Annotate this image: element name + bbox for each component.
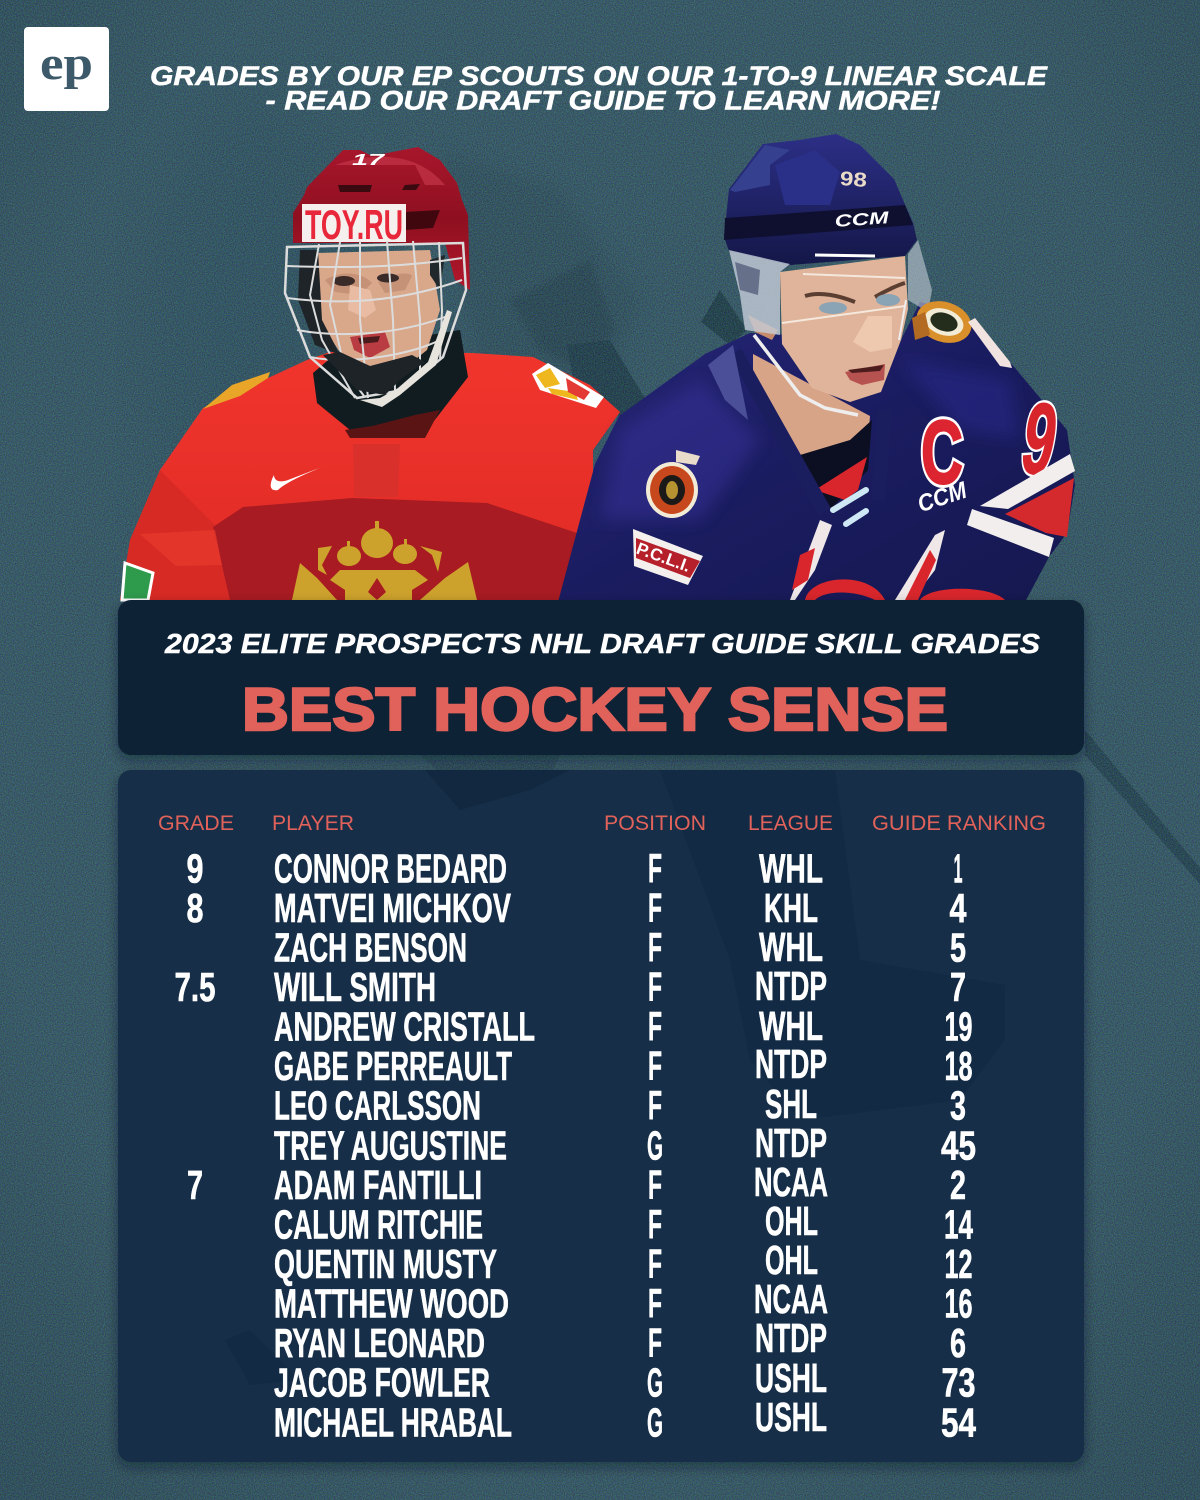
row: Ryan Leonard [274,1315,966,1366]
row: Will Smith: WILL SMITH [274,964,436,1010]
row: Michael Hrabal: 54 [941,1399,976,1445]
heading: BEST HOCKEY SENSE [242,676,948,743]
row: Zach Benson: WHL [759,924,823,970]
row: Gabe Perreault: F [648,1043,662,1089]
helmet [724,134,917,265]
panel: title banner [118,600,1084,755]
captain letter [914,403,971,518]
crest: golden eagle [292,521,477,600]
row: Adam Fantilli: 2 [950,1162,966,1208]
row: Gabe Perreault [274,1041,972,1089]
row: Zach Benson: 5 [950,924,966,970]
table header: GRADE [158,812,234,835]
row: Ryan Leonard: NTDP [755,1315,827,1361]
row: Will Smith: 7.5 [174,964,216,1010]
row: Calum Ritchie: OHL [765,1198,818,1244]
row: Will Smith: 7 [950,964,966,1010]
row: Adam Fantilli: ADAM FANTILLI [274,1162,482,1208]
row: Connor Bedard: CONNOR BEDARD [274,845,507,891]
helmet [293,147,470,290]
row: Calum Ritchie: F [648,1201,662,1247]
collar [735,352,885,512]
row: Matthew Wood [274,1276,972,1327]
patch: p.c.l.i.: P.C.L.I. [634,539,693,576]
sleeve number: 9 [1014,380,1065,498]
row: Zach Benson: F [648,924,662,970]
table header: POSITION [604,812,706,835]
row: Will Smith: F [648,964,662,1010]
row: Trey Augustine: TREY AUGUSTINE [274,1122,507,1168]
row: Andrew Cristall: F [648,1004,662,1050]
row: Leo Carlsson: 3 [950,1083,966,1129]
helmet sticker: toy.ru: TOY.RU [305,201,403,248]
row: Ryan Leonard: F [648,1320,662,1366]
row: Andrew Cristall: ANDREW CRISTALL [274,1004,535,1050]
row: Gabe Perreault: GABE PERREAULT [274,1043,512,1089]
row: Michael Hrabal [274,1394,976,1445]
row: Matthew Wood: NCAA [754,1276,828,1322]
table header: LEAGUE [748,812,833,835]
row: Matvei Michkov: 4 [950,885,967,931]
helmet sticker: toy.ru [302,201,406,248]
row: Connor Bedard: 9 [186,845,204,891]
row: Jacob Fowler [274,1355,976,1406]
row: Will Smith: NTDP [755,963,827,1009]
row: Leo Carlsson [274,1081,966,1129]
row: Connor Bedard: F [648,845,662,891]
row: Jacob Fowler: 73 [942,1360,976,1406]
row: Connor Bedard: WHL [759,845,823,891]
row: Calum Ritchie: CALUM RITCHIE [274,1201,483,1247]
subtitle: 2023 ELITE PROSPECTS NHL DRAFT GUIDE SKILL GRADES [164,628,1040,659]
row: Gabe Perreault: 18 [944,1043,972,1089]
row: Adam Fantilli: F [648,1162,662,1208]
row: Michael Hrabal: MICHAEL HRABAL [274,1399,512,1445]
row: Ryan Leonard: RYAN LEONARD [274,1320,485,1366]
row: Leo Carlsson: SHL [765,1081,817,1127]
icon: swoosh [271,467,322,490]
intro text: grades note: - READ OUR DRAFT GUIDE TO LEARN MORE! [266,86,940,116]
undershirt [790,420,872,510]
row: Quentin Musty: OHL [765,1237,818,1283]
row: Ryan Leonard: 6 [950,1320,966,1366]
row: Connor Bedard [186,845,962,891]
sleeve number: 9 [1014,380,1065,498]
row: Quentin Musty: QUENTIN MUSTY [274,1241,497,1287]
row: Matthew Wood: MATTHEW WOOD [274,1281,509,1327]
row: Andrew Cristall: WHL [759,1003,823,1049]
row: Matvei Michkov: MATVEI MICHKOV [274,885,511,931]
neck [753,354,870,485]
row: Trey Augustine: NTDP [755,1120,827,1166]
row: Jacob Fowler: USHL [755,1355,827,1401]
captain letter: C [921,403,963,503]
captain letter: C [921,403,963,503]
helmet number: 98 [839,168,868,192]
row: Gabe Perreault: NTDP [755,1041,827,1087]
player photo: red team jersey [120,147,620,600]
jersey badge: green sleeve [122,563,153,600]
neck gaiter [313,330,468,430]
visor [729,240,932,415]
shoulder patch: right [532,363,604,408]
logo: elite prospects [24,27,109,111]
chin guard [323,352,425,395]
row: Quentin Musty: F [648,1241,662,1287]
panel: grades table [118,770,1084,1462]
intro text: grades note [150,61,1048,116]
row: Matvei Michkov: F [648,885,662,931]
shoulder crest [646,450,700,518]
row: Andrew Cristall: 19 [944,1004,972,1050]
row: Jacob Fowler: G [647,1360,663,1406]
shoulder crest: right [911,294,977,350]
row: Zach Benson: ZACH BENSON [274,924,467,970]
sleeve stripes [967,454,1075,557]
intro text: grades note: GRADES BY OUR EP SCOUTS ON OUR 1-TO-9 LINEAR SCALE [150,61,1048,91]
row: Michael Hrabal: G [647,1399,663,1445]
row: Will Smith [174,963,966,1010]
row: Calum Ritchie: 14 [944,1201,973,1247]
team logo [790,520,1005,600]
row: Adam Fantilli [187,1159,966,1208]
face [317,250,440,380]
shoulder tag [968,318,1012,368]
row: Adam Fantilli: 7 [187,1162,203,1208]
logo: elite prospects: ep [40,37,93,90]
patch: p.c.l.i. [633,529,703,585]
row: Leo Carlsson: LEO CARLSSON [274,1083,481,1129]
face [780,256,908,402]
row: Adam Fantilli: NCAA [754,1159,828,1205]
table header [158,812,1046,835]
row: Matthew Wood: 16 [944,1281,972,1327]
row: Quentin Musty: 12 [944,1241,972,1287]
row: Leo Carlsson: F [648,1083,662,1129]
captain letter: CCM [914,477,971,518]
ear [748,315,778,340]
row: Trey Augustine: 45 [941,1122,976,1168]
row: Andrew Cristall [274,1003,972,1050]
helmet brand: CCM [834,208,890,231]
table header: GUIDE RANKING [872,812,1046,835]
row: Michael Hrabal: USHL [755,1394,827,1440]
panel: grades table: 1 [954,845,962,891]
row: Trey Augustine [274,1120,976,1168]
row: Matvei Michkov: KHL [764,885,818,931]
row: Trey Augustine: G [647,1122,663,1168]
row: Calum Ritchie [274,1198,973,1247]
row: Matthew Wood: F [648,1281,662,1327]
helmet number: 17 [352,152,386,169]
row: Jacob Fowler: JACOB FOWLER [274,1360,490,1406]
player photo: navy team jersey [558,134,1075,602]
row: Matvei Michkov [186,885,967,931]
sleeve number [1014,380,1065,498]
row: Quentin Musty [274,1237,972,1287]
cage [285,241,466,398]
table header: PLAYER [272,812,354,835]
shoulder patch: left [203,372,270,409]
row: Matvei Michkov: 8 [186,885,204,931]
row: Zach Benson [274,924,966,970]
